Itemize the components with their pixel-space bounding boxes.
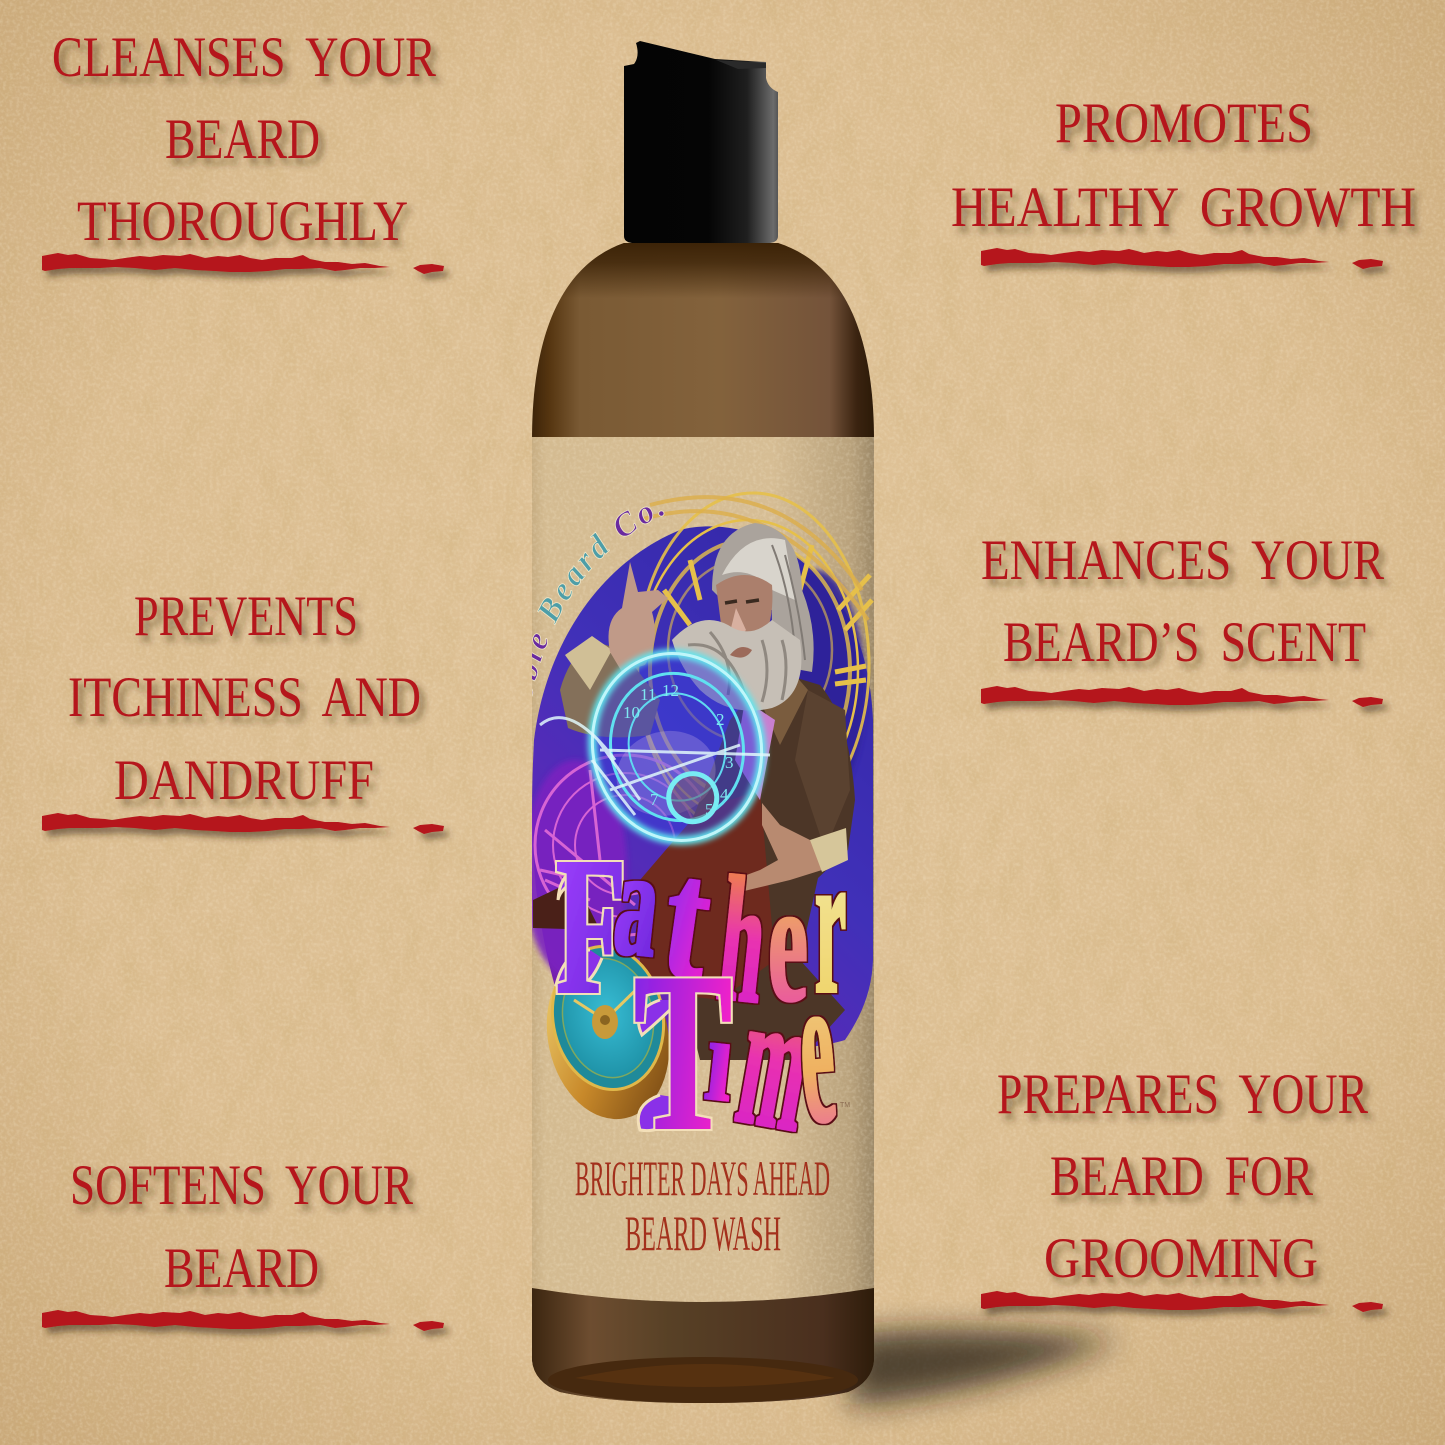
trademark: TM	[840, 1102, 850, 1109]
clock numerals: 5	[705, 800, 714, 819]
magic cyan clock	[584, 644, 771, 850]
product title: Father Time: F	[556, 816, 626, 1035]
clock numerals: 2	[716, 710, 724, 729]
bottle base	[532, 1285, 874, 1403]
feature: prevents itchiness and dandruff: ITCHINESS AND	[68, 666, 421, 729]
cap lid highlight	[716, 60, 766, 69]
feature: prevents itchiness and dandruff: PREVENTS	[134, 585, 358, 648]
feature: softens your beard: BEARD	[164, 1237, 319, 1300]
clock numerals: 7	[650, 790, 659, 809]
paper label: BRIGHTER DAYS AHEAD	[575, 1150, 830, 1206]
feature: cleanses your beard thoroughly	[42, 26, 444, 274]
bottle shoulder and body	[532, 243, 874, 1403]
lower hand	[746, 803, 822, 891]
product title: Father Time: a	[607, 816, 668, 991]
product title: Father Time: m	[725, 950, 826, 1174]
feature: prepares your beard for grooming: GROOMING	[1044, 1227, 1318, 1290]
feature: enhances your beard's scent: BEARD’S SCENT	[1003, 611, 1366, 674]
product subtitle	[575, 1150, 830, 1261]
feature: cleanses your beard thoroughly: THOROUGHLY	[77, 190, 408, 253]
beard	[672, 620, 801, 711]
feature: softens your beard: SOFTENS YOUR	[70, 1154, 413, 1217]
feature: prepares your beard for grooming	[981, 1063, 1383, 1312]
clock numerals: 10	[623, 703, 640, 722]
flip-top cap	[624, 41, 778, 243]
magic light streak	[540, 718, 770, 815]
product title: Father Time: e	[791, 925, 842, 1170]
pocket watch	[546, 945, 669, 1120]
raised hand	[608, 562, 668, 672]
feature: cleanses your beard thoroughly: BEARD	[165, 108, 320, 171]
product title: Father Time	[554, 860, 848, 1134]
clock numerals	[623, 681, 734, 819]
title swashes	[556, 867, 680, 1131]
red vest	[640, 790, 775, 1000]
face	[716, 575, 772, 632]
pink lower clock	[535, 755, 715, 935]
brown scarf	[533, 888, 597, 929]
product title: Father Time: r	[815, 807, 846, 1038]
gold clock rings	[637, 493, 872, 837]
coat	[693, 678, 855, 1060]
liquid in base	[548, 1357, 858, 1403]
paper label	[532, 437, 874, 1302]
shoulder shading	[532, 243, 874, 440]
feature: promotes healthy growth	[951, 92, 1416, 269]
product title: Father Time: t	[653, 821, 722, 1016]
feature: prevents itchiness and dandruff	[42, 585, 444, 834]
brand name on arc: Noble Beard Co.	[532, 506, 664, 697]
clock disc background	[523, 526, 873, 1049]
feature: prevents itchiness and dandruff: DANDRUFF	[114, 749, 374, 812]
feature: enhances your beard's scent	[981, 529, 1384, 707]
product title: Father Time: h	[711, 839, 775, 1043]
product subtitle: BEARD WASH	[625, 1205, 781, 1261]
feature: promotes healthy growth: PROMOTES	[1055, 92, 1313, 155]
feature: cleanses your beard thoroughly: CLEANSES YOUR	[52, 26, 436, 89]
product bottle	[532, 41, 874, 1403]
clock numerals: 4	[720, 785, 729, 804]
clock numerals: 3	[725, 753, 734, 772]
clock numerals: 12	[662, 681, 679, 700]
Father Time wizard figure	[540, 523, 855, 1060]
product title: Father Time: e	[768, 845, 808, 1039]
feature: prepares your beard for grooming: BEARD FOR	[1050, 1145, 1313, 1208]
raised arm sleeve	[560, 640, 660, 737]
bottle cast shadow	[850, 1330, 1120, 1405]
product title: Father Time: ı	[700, 993, 740, 1127]
product title: Father Time: T	[634, 927, 732, 1178]
long hair	[712, 523, 814, 672]
feature: softens your beard	[42, 1154, 444, 1331]
clock numerals: 11	[640, 685, 656, 704]
